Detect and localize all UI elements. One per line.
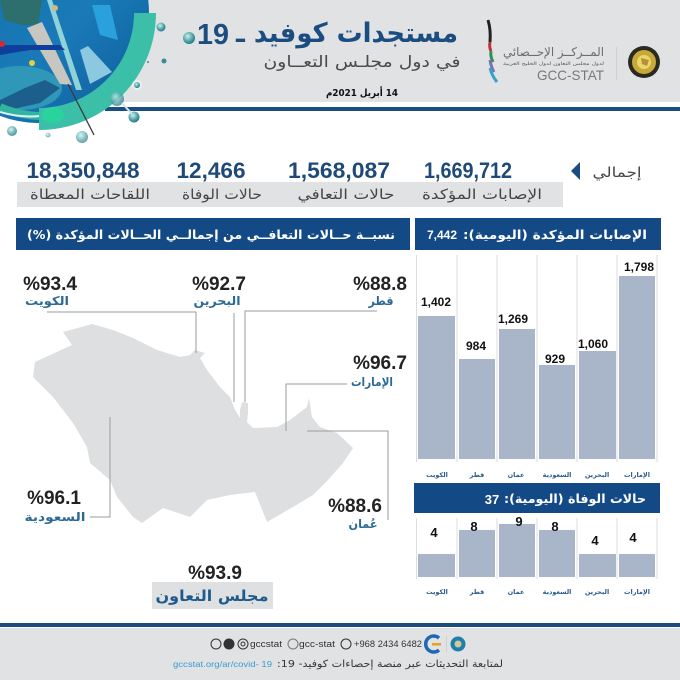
panel heading: daily deaths: 37 [485,492,499,507]
bar chart: daily deaths: 4 [629,530,637,545]
bar chart: daily confirmed cases: الإمارات [624,471,650,479]
bar chart: daily deaths: 9 [515,514,523,529]
map of GCC states [33,324,353,523]
bar chart: daily confirmed cases: الكويت [426,471,448,479]
logo: GCC-STAT ribbon [488,20,497,82]
panel heading: recovery rate [16,218,410,250]
panel heading: daily deaths [414,483,660,513]
logo: GCC-STAT wordmark: GCC-STAT [537,67,604,83]
date: 14 أبريل 2021م [326,86,398,99]
total: recoveries: حالات التعافي [298,187,394,203]
bar chart: daily deaths [416,514,657,596]
logo: GCC emblem [628,46,660,78]
panel heading: daily confirmed: الإصابات المؤكدة (اليومية): [463,227,647,242]
total: recoveries [288,158,394,203]
bar chart: daily confirmed cases: 1,060 [578,337,608,351]
total: deaths: حالات الوفاة [182,187,262,203]
bar chart: daily deaths: 4 [591,533,599,548]
bar chart: daily confirmed cases [416,255,657,479]
footer band [0,623,680,680]
footer: link text [173,659,503,670]
bar chart: daily confirmed cases: 1,269 [498,312,528,326]
footer: social icons and handles: +968 2434 6482 [354,639,422,649]
callout: Oman [307,431,388,531]
header image: laboratory circle with molecules [0,0,195,143]
panel heading: daily confirmed [415,218,661,250]
footer: social icons and handles [211,639,422,649]
logo: GCC-STAT wordmark [503,45,617,83]
callout: UAE: الإمارات [351,375,393,389]
callout: Bahrain: البحرين [194,294,240,308]
callout: UAE [286,353,407,431]
callout: Saudi Arabia: السعودية [24,510,86,525]
title: 19 [197,19,229,51]
header band [0,0,680,111]
callout: Bahrain: %92.7 [192,274,246,295]
bar chart: daily deaths: 8 [551,519,559,534]
callout: Bahrain [192,274,246,402]
bar chart: daily deaths: الكويت [426,588,448,596]
total: recoveries: 1,568,087 [288,158,390,183]
bar chart: daily confirmed cases: 929 [545,352,565,366]
bar chart: daily deaths: عمان [508,588,524,596]
bar chart: daily deaths: 4 [430,525,438,540]
bar chart: daily confirmed cases: عمان [508,471,524,479]
callout: GCC total: مجلس التعاون [156,587,268,605]
total: deaths [176,158,262,203]
total: deaths: 12,466 [176,158,246,183]
footer: link text: لمتابعة التحديثات عبر منصة إحصاءات كوفيد- 19: [277,659,503,670]
callout: Qatar: قطر [368,294,394,308]
callout: Qatar [245,274,407,402]
bar chart: daily confirmed cases: قطر [469,471,484,479]
callout: GCC total: %93.9 [188,563,242,584]
logo: GCC-STAT wordmark: المــركــز الإحــصائي [503,45,604,60]
footer: partner logos [426,636,466,652]
total: confirmed cases [422,158,542,203]
bar chart: daily confirmed cases: السعودية [543,471,571,479]
callout: Saudi Arabia [24,417,110,525]
panel heading: daily confirmed: 7,442 [427,228,457,242]
total: confirmed cases: الإصابات المؤكدة [422,187,542,203]
footer: link text: gccstat.org/ar/covid- 19 [173,659,272,669]
callout: Oman: %88.6 [328,496,382,517]
callout: UAE: %96.7 [353,353,407,374]
callout: Oman: عُمان [348,517,378,531]
total: vaccines [26,158,150,203]
total: vaccines: اللقاحات المعطاة [30,187,150,203]
callout: GCC total [152,563,273,609]
logo: GCC-STAT wordmark: لدول مجلس التعاون لدول الخليج العربية [503,62,604,67]
callout: Kuwait [23,274,196,353]
callout: Kuwait: الكويت [25,294,69,309]
total: confirmed cases: 1,669,712 [424,158,512,183]
bar chart: daily deaths: 8 [470,519,478,534]
total: vaccines: 18,350,848 [26,158,140,183]
panel heading: recovery rate: نسبــة حــالات التعافــي من إجمالــي الحــالات المؤكدة (%) [27,227,395,242]
totals: grey band [17,182,563,207]
footer: social icons and handles: gcc-stat [299,639,336,649]
callout: Saudi Arabia: %96.1 [27,488,81,509]
subtitle: في دول مجلـس التعــاون [264,52,460,72]
footer: social icons and handles: gccstat [250,639,283,649]
totals: label [571,162,642,181]
callout: Qatar: %88.8 [353,274,407,295]
callout: Kuwait: %93.4 [23,274,77,295]
title: مستجدات كوفيد ـ [235,18,458,49]
bar chart: daily deaths: الإمارات [624,588,650,596]
bar chart: daily confirmed cases: 984 [466,339,486,353]
bar chart: daily deaths: السعودية [543,588,571,596]
bar chart: daily confirmed cases: 1,402 [421,295,451,309]
bar chart: daily deaths: قطر [469,588,484,596]
panel heading: daily deaths: حالات الوفاة (اليومية): [504,491,646,506]
bar chart: daily confirmed cases: البحرين [585,471,609,479]
totals: label: إجمالي [592,165,642,181]
bar chart: daily confirmed cases: 1,798 [624,260,654,274]
bar chart: daily deaths: البحرين [585,588,609,596]
